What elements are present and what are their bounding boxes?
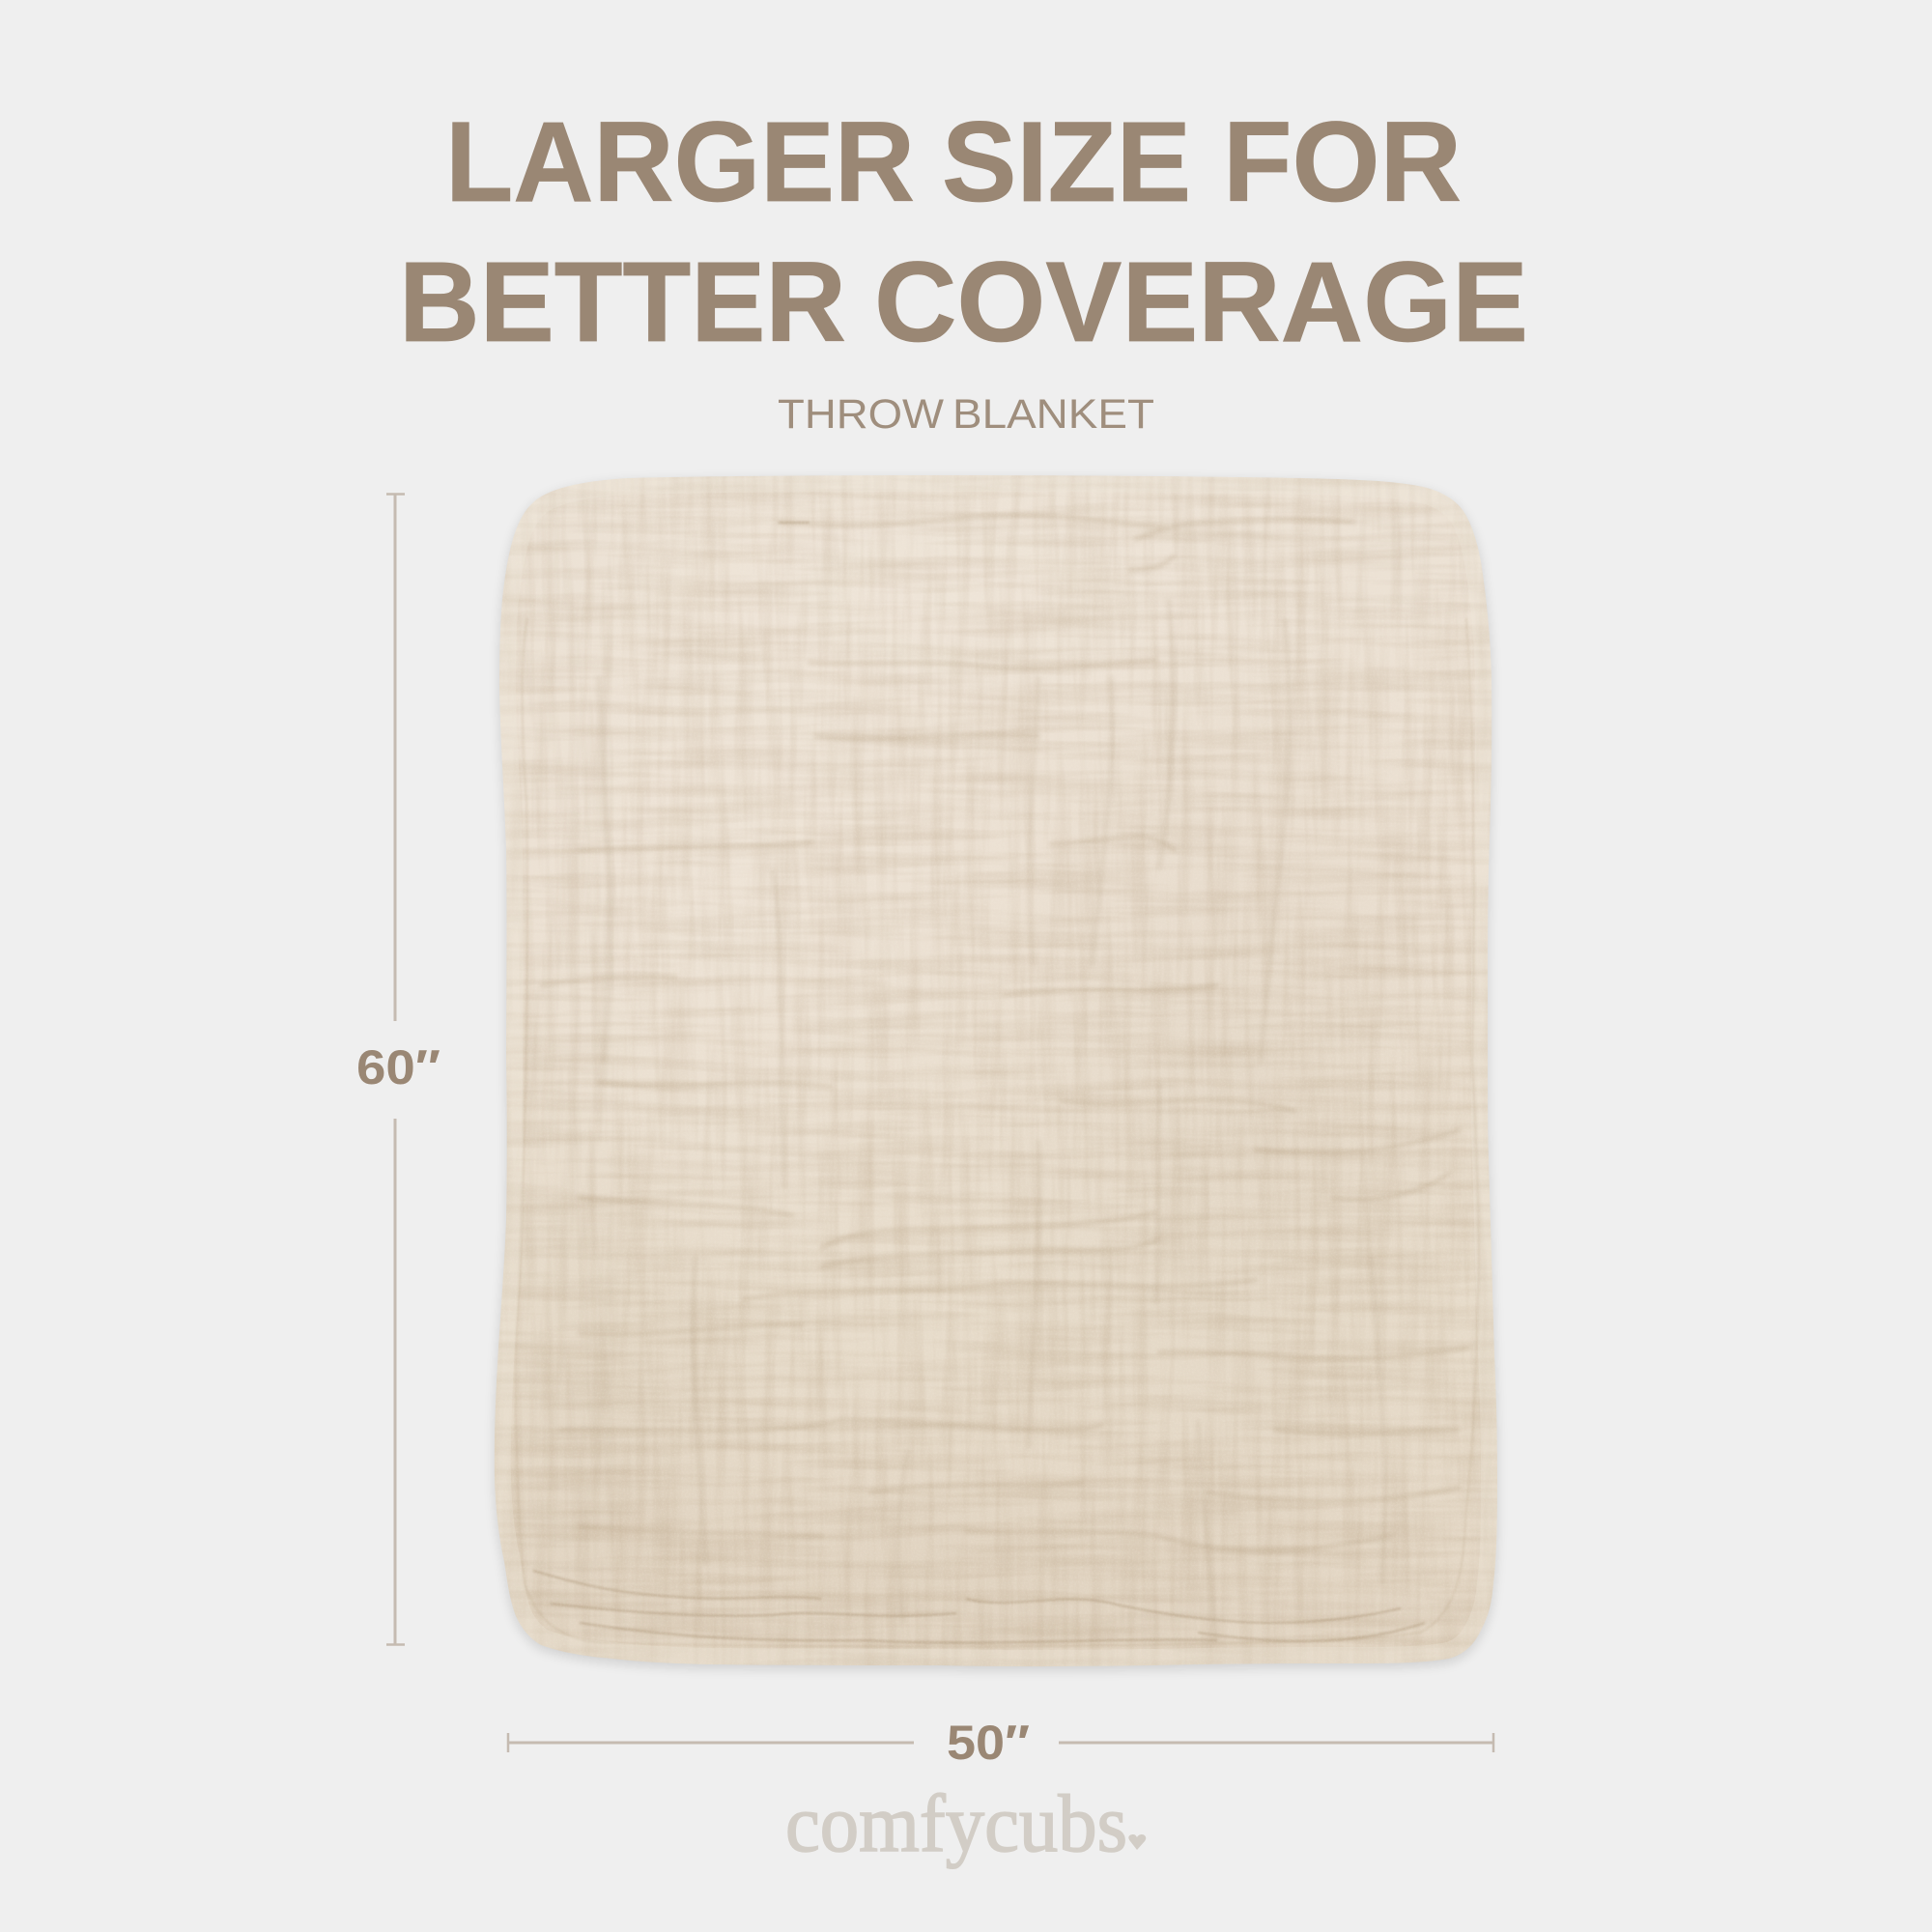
subtitle: BLANKET <box>952 391 1154 438</box>
icon: heart <box>1128 1834 1146 1850</box>
height dimension: 60 inches: 60″ <box>356 1040 440 1094</box>
title: LARGER <box>445 99 915 226</box>
title: SIZE <box>942 99 1191 226</box>
inner hem seam <box>516 618 1479 1647</box>
title: COVERAGE <box>874 239 1528 366</box>
title: BETTER <box>399 239 846 366</box>
width dimension: 50 inches: 50″ <box>947 1716 1030 1770</box>
horizontal wrinkles <box>541 515 1468 1550</box>
title: FOR <box>1223 99 1462 226</box>
blanket shadow <box>495 479 1497 1670</box>
width dimension: 50 inches <box>508 1716 1493 1770</box>
vertical ribs <box>599 599 1384 1642</box>
logo: comfycubs: comfycubs <box>785 1778 1127 1869</box>
height dimension: 60 inches <box>356 494 440 1645</box>
hem band <box>495 475 1497 1666</box>
subtitle <box>778 391 1154 438</box>
blanket fabric <box>495 475 1497 1666</box>
bottom ripple lines <box>533 523 1425 1643</box>
title <box>399 99 1528 366</box>
blanket photo <box>491 475 1501 1674</box>
subtitle: THROW <box>778 391 944 438</box>
